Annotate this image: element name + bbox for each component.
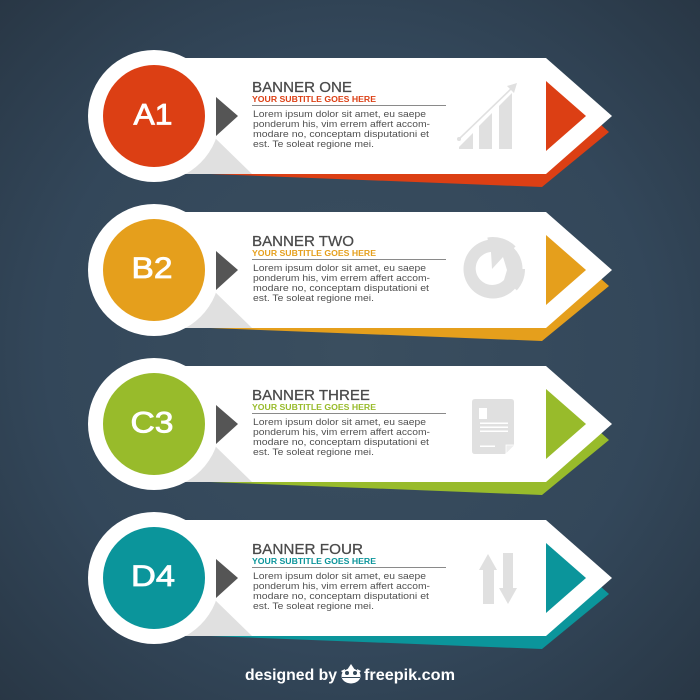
footer credit (245, 664, 455, 684)
banner four ribbon shadow (185, 586, 609, 649)
banner three body text: ponderum his, vim errem affert accom- (253, 427, 430, 438)
banner two body text: modare no, conceptam disputationi et (253, 283, 429, 294)
banner four (88, 512, 612, 649)
banner three subtitle: YOUR SUBTITLE GOES HERE (252, 403, 377, 412)
banner one grey fold (180, 136, 252, 174)
icon: circular cycle chart (464, 237, 525, 298)
banner two dark pointer (216, 251, 238, 290)
banner three body text (253, 417, 430, 458)
banner three body text: modare no, conceptam disputationi et (253, 437, 429, 448)
banner four white arrow panel (154, 520, 612, 636)
banner one circle badge: A1 (134, 98, 172, 132)
banner two circle badge: B2 (132, 252, 172, 285)
banner four grey fold (180, 598, 252, 636)
banner one body text: ponderum his, vim errem affert accom- (253, 119, 430, 130)
banner three circle badge: C3 (130, 406, 174, 440)
banner two body text: est. Te soleat regione mei. (253, 293, 374, 304)
banner four circle badge (88, 512, 220, 644)
banner four body text (253, 571, 430, 612)
banner one circle badge (88, 50, 220, 182)
banner two white arrow panel (154, 212, 612, 328)
banner three dark pointer (216, 405, 238, 444)
banner two circle badge (88, 204, 220, 336)
banner two (88, 204, 612, 341)
banner three body text: est. Te soleat regione mei. (253, 447, 374, 458)
banner four arrow triangle (546, 543, 586, 613)
banner four body text: est. Te soleat regione mei. (253, 601, 374, 612)
banner two title: BANNER TWO (252, 234, 354, 250)
banner two body text: ponderum his, vim errem affert accom- (253, 273, 430, 284)
icon: document (472, 399, 515, 454)
banner one arrow triangle (546, 81, 586, 151)
icon: freepik mascot (341, 664, 361, 684)
banner three white arrow panel (154, 366, 612, 482)
banner three grey fold (180, 444, 252, 482)
banner four title: BANNER FOUR (252, 542, 363, 558)
banner one white arrow panel (154, 58, 612, 174)
icon: rising bar chart (457, 83, 517, 149)
banner two ribbon shadow (185, 278, 609, 341)
banner one title: BANNER ONE (252, 80, 352, 96)
banner two grey fold (180, 290, 252, 328)
banner three arrow triangle (546, 389, 586, 459)
banner four subtitle: YOUR SUBTITLE GOES HERE (252, 557, 377, 566)
icon: up and down arrows (479, 553, 517, 604)
banner one dark pointer (216, 97, 238, 136)
banner four dark pointer (216, 559, 238, 598)
banner two body text: Lorem ipsum dolor sit amet, eu saepe (253, 263, 426, 274)
banner three title: BANNER THREE (252, 388, 370, 404)
banner one body text: modare no, conceptam disputationi et (253, 129, 429, 140)
banner four body text: Lorem ipsum dolor sit amet, eu saepe (253, 571, 426, 582)
banner two subtitle: YOUR SUBTITLE GOES HERE (252, 249, 377, 258)
banner one body text: Lorem ipsum dolor sit amet, eu saepe (253, 109, 426, 120)
banner four circle badge: D4 (131, 560, 175, 593)
footer credit: freepik.com (364, 667, 455, 684)
banner three (88, 358, 612, 495)
banner three body text: Lorem ipsum dolor sit amet, eu saepe (253, 417, 426, 428)
banner three circle badge (88, 358, 220, 490)
banner one subtitle: YOUR SUBTITLE GOES HERE (252, 95, 377, 104)
banner four body text: ponderum his, vim errem affert accom- (253, 581, 430, 592)
banner two body text (253, 263, 430, 304)
banner three ribbon shadow (185, 432, 609, 495)
banner one body text: est. Te soleat regione mei. (253, 139, 374, 150)
footer credit: designed by (245, 667, 337, 684)
banner one (88, 50, 612, 187)
banner two arrow triangle (546, 235, 586, 305)
banner four body text: modare no, conceptam disputationi et (253, 591, 429, 602)
banner one body text (253, 109, 430, 150)
banner one ribbon shadow (185, 124, 609, 187)
